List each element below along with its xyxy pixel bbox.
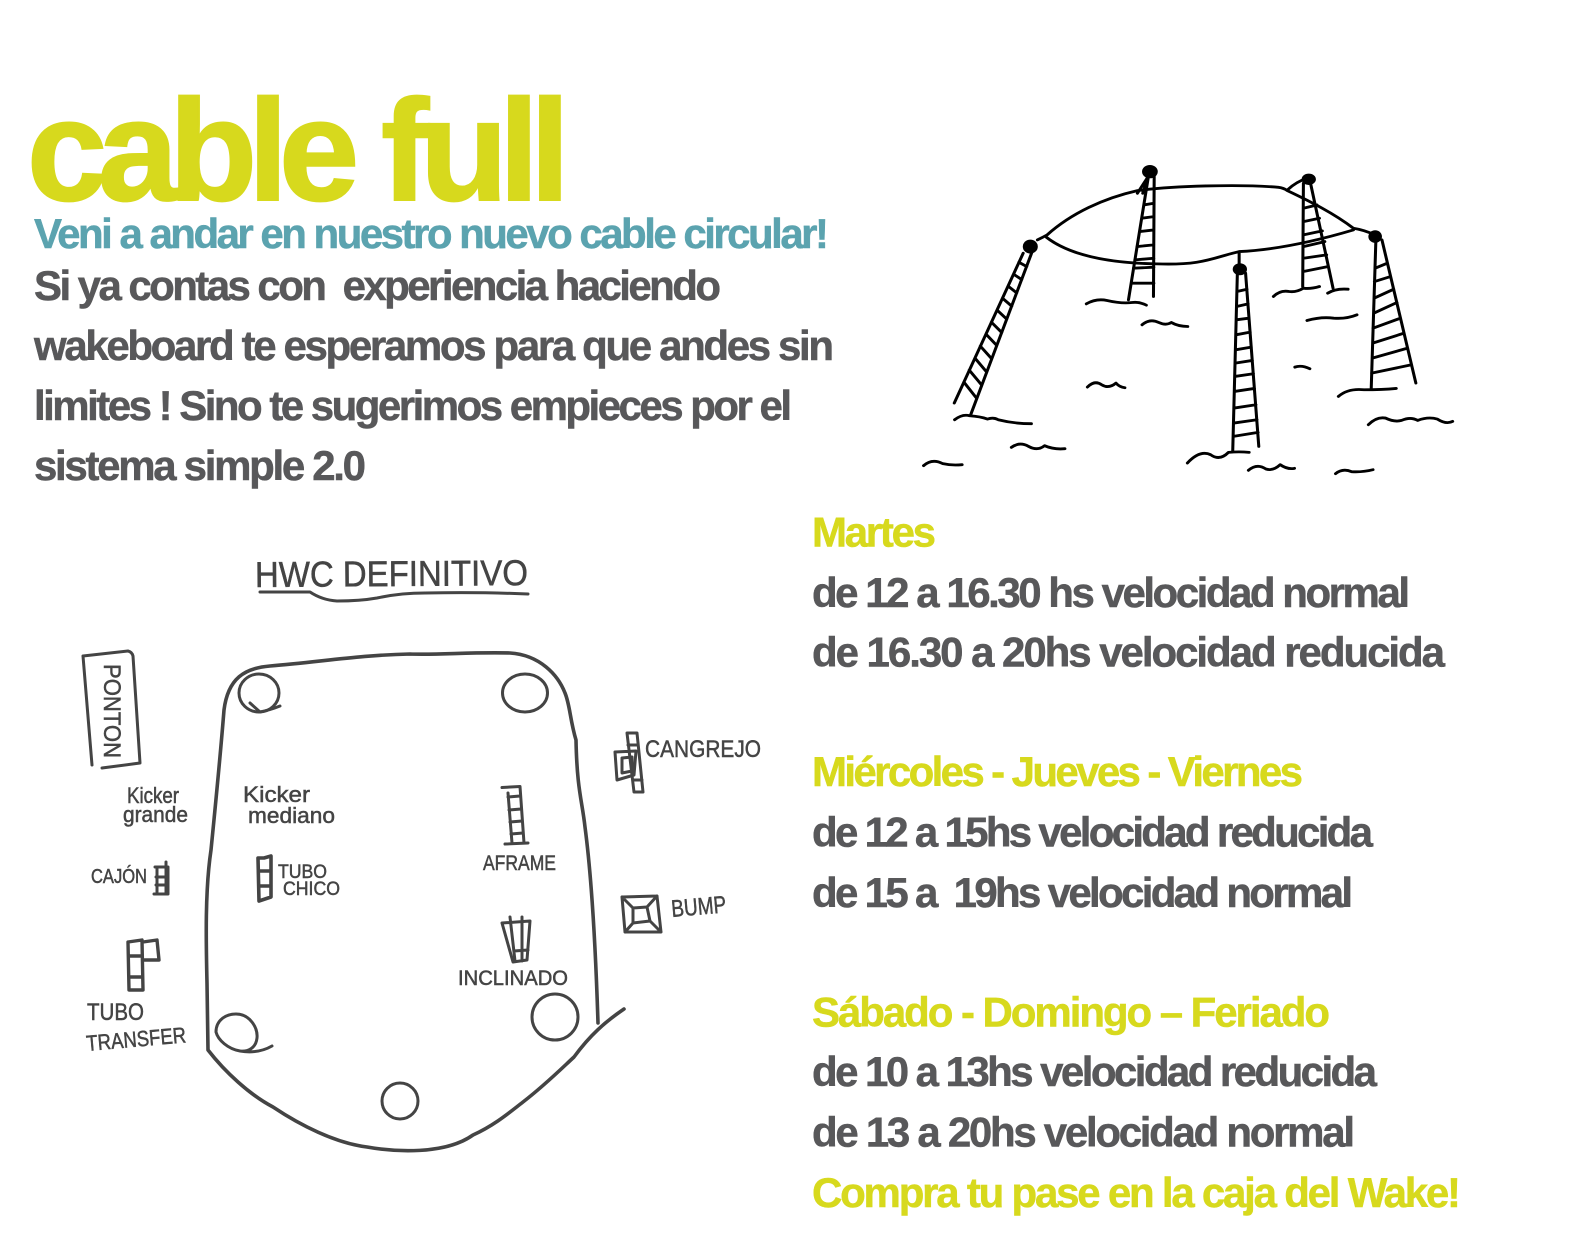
tubo chico: CHICO (283, 879, 340, 900)
schedule: miercoles a viernes: Miércoles - Jueves - Viernes (812, 748, 1303, 795)
tower back left (1128, 177, 1154, 300)
lake outline (206, 653, 624, 1151)
cajon (91, 862, 168, 894)
bump (622, 891, 727, 932)
label: kicker mediano: mediano (248, 803, 335, 828)
tower front (1233, 273, 1259, 451)
schedule: martes: de 16.30 a 20hs velocidad reducida (812, 628, 1446, 676)
map title: HWC DEFINITIVO (255, 552, 528, 595)
cangrejo (615, 733, 761, 792)
schedule: martes (812, 508, 1446, 676)
intro paragraph: limites ! Sino te sugerimos empieces por el (34, 382, 792, 429)
tubo chico: TUBO (278, 862, 327, 883)
schedule: martes: Martes (812, 508, 936, 556)
tower left (954, 250, 1033, 415)
intro paragraph: Si ya contas con experiencia haciendo (34, 262, 721, 309)
schedule: fin de semana: de 13 a 20hs velocidad normal (812, 1108, 1355, 1156)
cangrejo: CANGREJO (645, 736, 761, 763)
intro paragraph: sistema simple 2.0 (34, 442, 366, 489)
schedule: miercoles a viernes: de 15 a 19hs velocidad normal (812, 869, 1353, 916)
cajon: CAJÓN (91, 865, 147, 888)
ponton: PONTON (98, 664, 125, 758)
label: kicker grande: Kicker (127, 783, 179, 808)
label: kicker grande: grande (123, 802, 188, 827)
tubo transfer: TRANSFER (85, 1022, 187, 1056)
intro paragraph (33, 262, 834, 489)
tubo transfer (85, 940, 187, 1056)
schedule: fin de semana (812, 988, 1378, 1156)
label: kicker mediano: Kicker (243, 782, 310, 807)
bump: BUMP (670, 891, 727, 923)
cable loop (1037, 177, 1375, 265)
aframe: AFRAME (483, 852, 556, 875)
inclinado (458, 917, 568, 990)
aframe (483, 786, 556, 875)
schedule: fin de semana: Sábado - Domingo – Feriado (812, 988, 1330, 1036)
label: kicker mediano (243, 782, 335, 828)
ponton (83, 651, 140, 768)
schedule: miercoles a viernes: de 12 a 15hs velocidad reducida (812, 808, 1374, 856)
tubo chico (258, 856, 340, 901)
park map sketch (83, 552, 761, 1151)
subtitle: Veni a andar en nuestro nuevo cable circular! (34, 210, 829, 257)
schedule: fin de semana: de 10 a 13hs velocidad reducida (812, 1048, 1378, 1095)
label: kicker grande (123, 783, 188, 827)
tubo transfer: TUBO (87, 999, 144, 1026)
inclinado: INCLINADO (458, 967, 568, 990)
schedule: martes: de 12 a 16.30 hs velocidad normal (812, 569, 1410, 616)
illustration: circular cable with towers (924, 165, 1453, 474)
tower back right (1303, 183, 1333, 288)
tower right (1371, 240, 1416, 388)
tower circles (216, 674, 578, 1119)
schedule: miercoles a viernes (812, 748, 1374, 916)
map title underline (260, 592, 528, 601)
title: cable full (27, 70, 570, 231)
intro paragraph: wakeboard te esperamos para que andes sin (33, 322, 834, 369)
water waves (924, 287, 1453, 474)
call to action: Compra tu pase en la caja del Wake! (812, 1169, 1461, 1216)
tower heads (1023, 165, 1382, 275)
